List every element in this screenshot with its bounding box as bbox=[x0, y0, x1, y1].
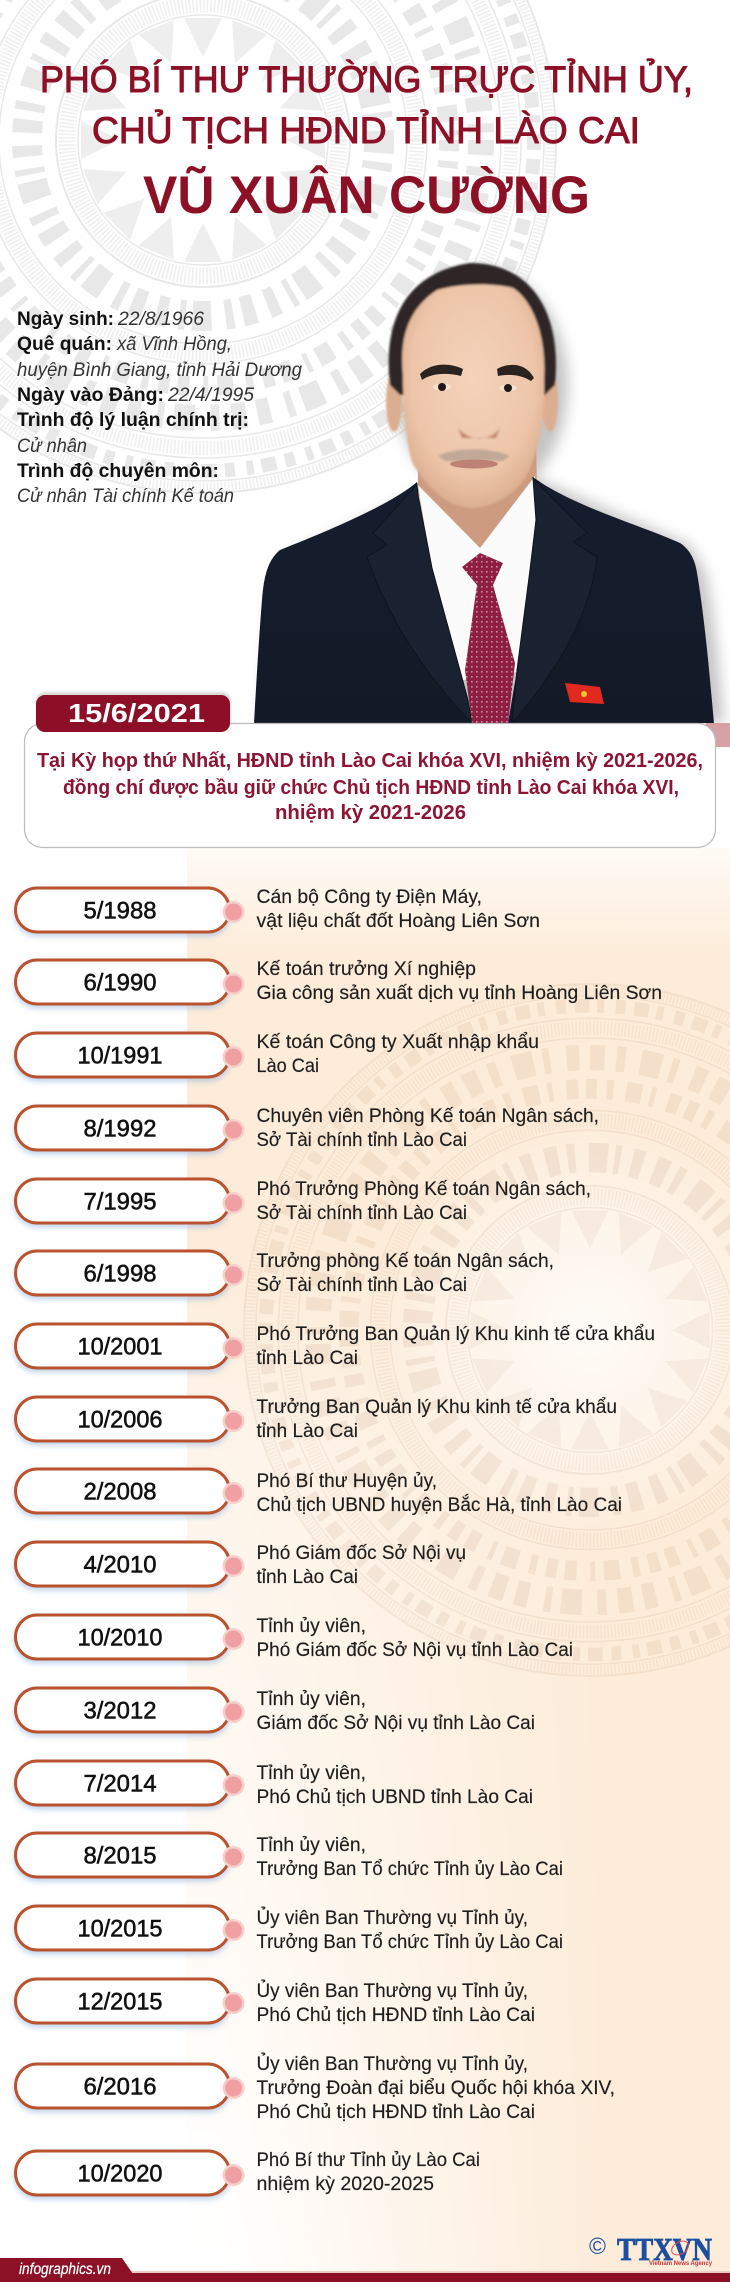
date badge bbox=[36, 692, 231, 732]
row 2/2008: 2/2008 bbox=[84, 1478, 156, 1506]
row 5/1988: vật liệu chất đốt Hoàng Liên Sơn bbox=[256, 911, 540, 932]
personal info: 22/4/1995 bbox=[167, 385, 254, 406]
row 7/1995: Phó Trưởng Phòng Kế toán Ngân sách, bbox=[256, 1179, 591, 1200]
TTXVN logo: TTXVN bbox=[617, 2231, 712, 2267]
personal info: Cử nhân Tài chính Kế toán bbox=[17, 486, 234, 507]
row 5/1988 bbox=[16, 887, 540, 932]
row 10/2015: Ủy viên Ban Thường vụ Tỉnh ủy, bbox=[256, 1907, 528, 1929]
row 8/2015: Tỉnh ủy viên, bbox=[256, 1835, 366, 1856]
row 10/2001: tỉnh Lào Cai bbox=[256, 1348, 358, 1369]
row 2/2008 bbox=[16, 1469, 622, 1516]
event box: Tại Kỳ họp thứ Nhất, HĐND tỉnh Lào Cai khóa XVI, nhiệm kỳ 2021-2026, bbox=[37, 750, 703, 772]
row 8/1992 bbox=[16, 1106, 599, 1151]
row 7/2014 bbox=[16, 1761, 533, 1808]
row 10/2020: Phó Bí thư Tỉnh ủy Lào Cai bbox=[256, 2150, 480, 2171]
top drum pattern bbox=[0, 0, 556, 493]
shirt bbox=[418, 476, 538, 680]
row 3/2012 bbox=[16, 1688, 535, 1734]
row 10/1991: 10/1991 bbox=[78, 1042, 162, 1070]
row 4/2010: Phó Giám đốc Sở Nội vụ bbox=[256, 1543, 466, 1564]
TTXVN logo: © bbox=[589, 2233, 606, 2259]
timeline bbox=[16, 887, 662, 2195]
necktie bbox=[462, 553, 515, 723]
event box: nhiệm kỳ 2021-2026 bbox=[275, 802, 466, 824]
TTXVN logo: Vietnam News Agency bbox=[649, 2260, 712, 2267]
row 2/2008: Chủ tịch UBND huyện Bắc Hà, tỉnh Lào Cai bbox=[256, 1494, 622, 1516]
row 4/2010: 4/2010 bbox=[84, 1552, 156, 1578]
row 10/2015: Trưởng Ban Tổ chức Tỉnh ủy Lào Cai bbox=[256, 1932, 563, 1953]
row 10/1991: Kế toán Công ty Xuất nhập khẩu bbox=[256, 1032, 539, 1053]
title bbox=[40, 58, 693, 225]
row 7/2014: Tỉnh ủy viên, bbox=[256, 1763, 366, 1784]
row 4/2010: tỉnh Lào Cai bbox=[256, 1567, 358, 1588]
pink strip behind box bbox=[706, 723, 730, 747]
row 6/2016: Ủy viên Ban Thường vụ Tỉnh ủy, bbox=[256, 2053, 528, 2075]
personal info: huyện Bình Giang, tỉnh Hải Dương bbox=[17, 360, 302, 381]
row 8/2015 bbox=[16, 1833, 563, 1880]
flag pin bbox=[565, 683, 604, 704]
row 6/1998: Trưởng phòng Kế toán Ngân sách, bbox=[256, 1251, 554, 1272]
hair bbox=[389, 263, 556, 395]
row 10/2001: Phó Trưởng Ban Quản lý Khu kinh tế cửa khẩu bbox=[256, 1324, 655, 1345]
personal info: xã Vĩnh Hồng, bbox=[116, 334, 232, 355]
footer bbox=[0, 2258, 730, 2282]
personal info bbox=[17, 309, 302, 507]
row 6/1990: Kế toán trưởng Xí nghiệp bbox=[256, 959, 476, 980]
row 10/2010: Phó Giám đốc Sở Nội vụ tỉnh Lào Cai bbox=[256, 1640, 573, 1661]
neck bbox=[418, 440, 537, 550]
personal info: Quê quán: bbox=[17, 334, 112, 355]
row 7/1995: Sở Tài chính tỉnh Lào Cai bbox=[256, 1203, 467, 1224]
ears bbox=[386, 372, 402, 432]
peach panel bbox=[187, 848, 730, 2271]
footer: infographics.vn bbox=[19, 2261, 111, 2278]
face bbox=[402, 284, 544, 508]
row 10/2010: Tỉnh ủy viên, bbox=[256, 1616, 366, 1637]
row 8/1992: Chuyên viên Phòng Kế toán Ngân sách, bbox=[256, 1106, 599, 1127]
jacket bbox=[254, 477, 714, 723]
row 6/1998 bbox=[16, 1251, 554, 1296]
row 12/2015: Phó Chủ tịch HĐND tỉnh Lào Cai bbox=[256, 2005, 535, 2026]
lower drum pattern bbox=[244, 984, 730, 1676]
title: PHÓ BÍ THƯ THƯỜNG TRỰC TỈNH ỦY, bbox=[40, 58, 693, 100]
row 10/2001: 10/2001 bbox=[78, 1334, 162, 1360]
row 3/2012: Giám đốc Sở Nội vụ tỉnh Lào Cai bbox=[256, 1713, 535, 1734]
row 10/1991: Lào Cai bbox=[256, 1056, 319, 1077]
title: CHỦ TỊCH HĐND TỈNH LÀO CAI bbox=[92, 109, 640, 151]
event box bbox=[24, 724, 716, 848]
row 12/2015: Ủy viên Ban Thường vụ Tỉnh ủy, bbox=[256, 1980, 528, 2002]
row 10/2020 bbox=[16, 2150, 480, 2195]
row 10/2010: 10/2010 bbox=[78, 1624, 162, 1652]
row 10/2010 bbox=[16, 1615, 573, 1661]
row 2/2008: Phó Bí thư Huyện ủy, bbox=[256, 1471, 437, 1492]
row 5/1988: Cán bộ Công ty Điện Máy, bbox=[256, 887, 482, 908]
row 10/2020: 10/2020 bbox=[78, 2160, 162, 2188]
row 8/2015: Trưởng Ban Tổ chức Tỉnh ủy Lào Cai bbox=[256, 1859, 563, 1880]
row 8/1992: Sở Tài chính tỉnh Lào Cai bbox=[256, 1130, 467, 1151]
portrait shadow bbox=[262, 269, 724, 723]
row 6/1990: Gia công sản xuất dịch vụ tỉnh Hoàng Liên Sơn bbox=[256, 983, 662, 1004]
row 10/2006 bbox=[16, 1397, 617, 1442]
row 10/2020: nhiệm kỳ 2020-2025 bbox=[256, 2174, 434, 2195]
personal info: Trình độ lý luận chính trị: bbox=[17, 410, 249, 431]
row 8/1992: 8/1992 bbox=[84, 1116, 156, 1142]
portrait bbox=[254, 263, 724, 723]
personal info: Ngày vào Đảng: bbox=[17, 385, 164, 406]
row 10/2001 bbox=[16, 1324, 655, 1369]
row 10/2006: Trưởng Ban Quản lý Khu kinh tế cửa khẩu bbox=[256, 1397, 617, 1418]
row 4/2010 bbox=[16, 1542, 466, 1588]
row 10/2006: 10/2006 bbox=[78, 1406, 162, 1434]
row 12/2015: 12/2015 bbox=[78, 1988, 162, 2016]
row 3/2012: 3/2012 bbox=[84, 1698, 156, 1724]
row 6/2016: Phó Chủ tịch HĐND tỉnh Lào Cai bbox=[256, 2102, 535, 2123]
row 6/2016 bbox=[16, 2053, 615, 2123]
personal info: Ngày sinh: bbox=[17, 309, 114, 330]
row 7/1995: 7/1995 bbox=[84, 1188, 156, 1216]
facial features bbox=[420, 365, 534, 468]
row 3/2012: Tỉnh ủy viên, bbox=[256, 1689, 366, 1710]
row 10/2006: tỉnh Lào Cai bbox=[256, 1421, 358, 1442]
row 6/2016: 6/2016 bbox=[84, 2074, 156, 2100]
TTXVN logo bbox=[589, 2231, 712, 2267]
head bbox=[386, 263, 558, 508]
row 8/2015: 8/2015 bbox=[84, 1842, 156, 1870]
row 5/1988: 5/1988 bbox=[84, 898, 156, 924]
row 6/2016: Trưởng Đoàn đại biểu Quốc hội khóa XIV, bbox=[256, 2078, 615, 2099]
row 7/1995 bbox=[16, 1179, 591, 1224]
row 7/2014: Phó Chủ tịch UBND tỉnh Lào Cai bbox=[256, 1787, 533, 1808]
row 6/1990 bbox=[16, 959, 662, 1004]
row 7/2014: 7/2014 bbox=[84, 1770, 156, 1798]
row 10/2015: 10/2015 bbox=[78, 1916, 162, 1942]
row 12/2015 bbox=[16, 1979, 535, 2026]
personal info: 22/8/1966 bbox=[117, 309, 204, 330]
personal info: Trình độ chuyên môn: bbox=[17, 461, 219, 482]
personal info: Cử nhân bbox=[17, 436, 87, 457]
row 6/1990: 6/1990 bbox=[84, 970, 156, 996]
lapels bbox=[367, 478, 597, 723]
event box: đồng chí được bầu giữ chức Chủ tịch HĐND tỉnh Lào Cai khóa XVI, bbox=[63, 777, 679, 799]
row 6/1998: Sở Tài chính tỉnh Lào Cai bbox=[256, 1275, 467, 1296]
row 10/2015 bbox=[16, 1906, 563, 1953]
row 10/1991 bbox=[16, 1032, 539, 1077]
row 6/1998: 6/1998 bbox=[84, 1260, 156, 1288]
title: VŨ XUÂN CƯỜNG bbox=[143, 164, 590, 225]
date badge: 15/6/2021 bbox=[68, 698, 205, 728]
